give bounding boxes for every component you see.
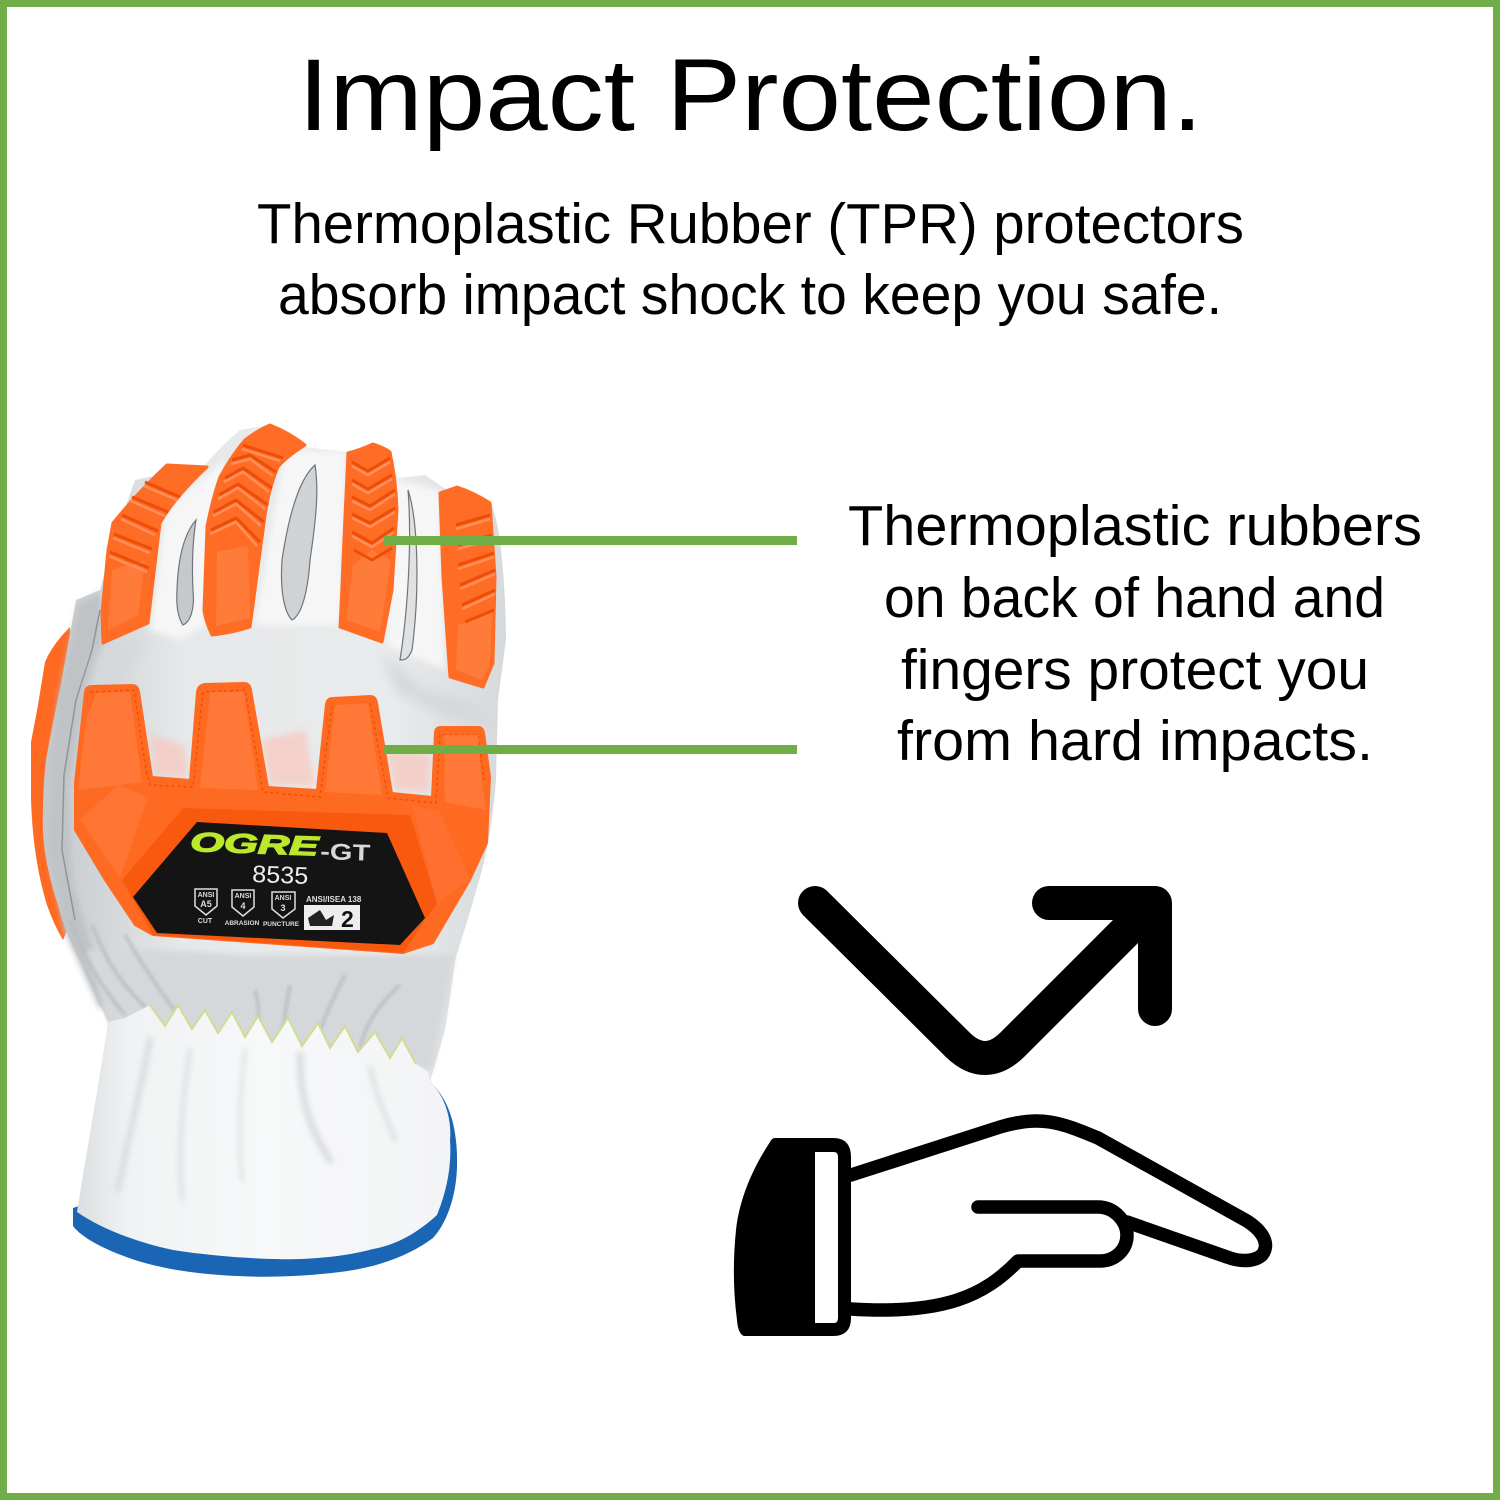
puncture shield [263,892,300,928]
left side leather fold shading [48,592,108,1010]
callout text block: from hard impacts. [897,709,1373,773]
title: Impact Protection. [298,38,1203,152]
finger protector 4 [440,487,495,687]
hand cuff [734,1138,851,1336]
leather cuff with gathered top edge [77,1005,450,1259]
ANSI/ISEA 138 badge: ANSI/ISEA 138 [306,895,362,904]
finger slits [177,465,417,660]
callout text block: on back of hand and [884,566,1385,630]
icon: impact arrow bouncing upward [815,903,1155,1058]
finger protector 3 [340,444,397,642]
cut shield: A5 [200,899,212,909]
callout text block [848,494,1422,773]
gathered wrist shading [85,950,455,1070]
model number: 8535 [252,861,309,890]
frame around label [122,808,437,953]
pink reflection on leather [150,730,430,792]
plate facets [78,692,142,790]
abrasion shield [225,890,260,927]
blue cuff binding [73,1082,457,1277]
hand outline [851,1121,1266,1261]
logo OGRE-GT: -GT [320,838,371,866]
callout text block: fingers protect you [901,638,1369,702]
cut shield: ANSI [198,892,214,899]
subtitle text block [257,192,1244,327]
subtitle text block: absorb impact shock to keep you safe. [278,263,1222,327]
cuff shading folds [118,1040,395,1200]
wrist folds [70,920,400,1048]
logo OGRE-GT [190,827,371,866]
logo OGRE-GT: OGRE [190,827,320,862]
puncture shield: ANSI [275,895,291,902]
finger protector 2 [204,425,305,635]
black product label [133,822,425,945]
callout line: hand protector [384,745,797,754]
abrasion shield: 4 [240,901,246,911]
ANSI/ISEA 138 badge: 2 [341,906,354,932]
cut shield: CUT [198,918,213,925]
callout line: finger protectors [384,536,797,545]
thumb outline [851,1207,1127,1310]
cut shield [195,889,217,925]
abrasion shield: ANSI [235,893,251,900]
thumb side protector [31,627,80,940]
finger protector 1 [102,465,207,643]
subtitle text block: Thermoplastic Rubber (TPR) protectors [257,192,1244,256]
zigzag elastic stitch [150,1005,416,1064]
white leather between fingers [150,450,445,670]
glove photo illustration [31,425,506,1277]
puncture shield: 3 [280,903,286,913]
glove body [43,425,506,1110]
abrasion shield: ABRASION [225,920,260,927]
ANSI/ISEA 138 badge [304,895,362,932]
knuckle leather shading [85,640,495,730]
puncture shield: PUNCTURE [263,921,300,928]
back of hand protector plate [75,683,490,953]
icon: protected hand [734,1121,1266,1336]
callout text block: Thermoplastic rubbers [848,494,1422,558]
plate stitching [90,690,484,803]
